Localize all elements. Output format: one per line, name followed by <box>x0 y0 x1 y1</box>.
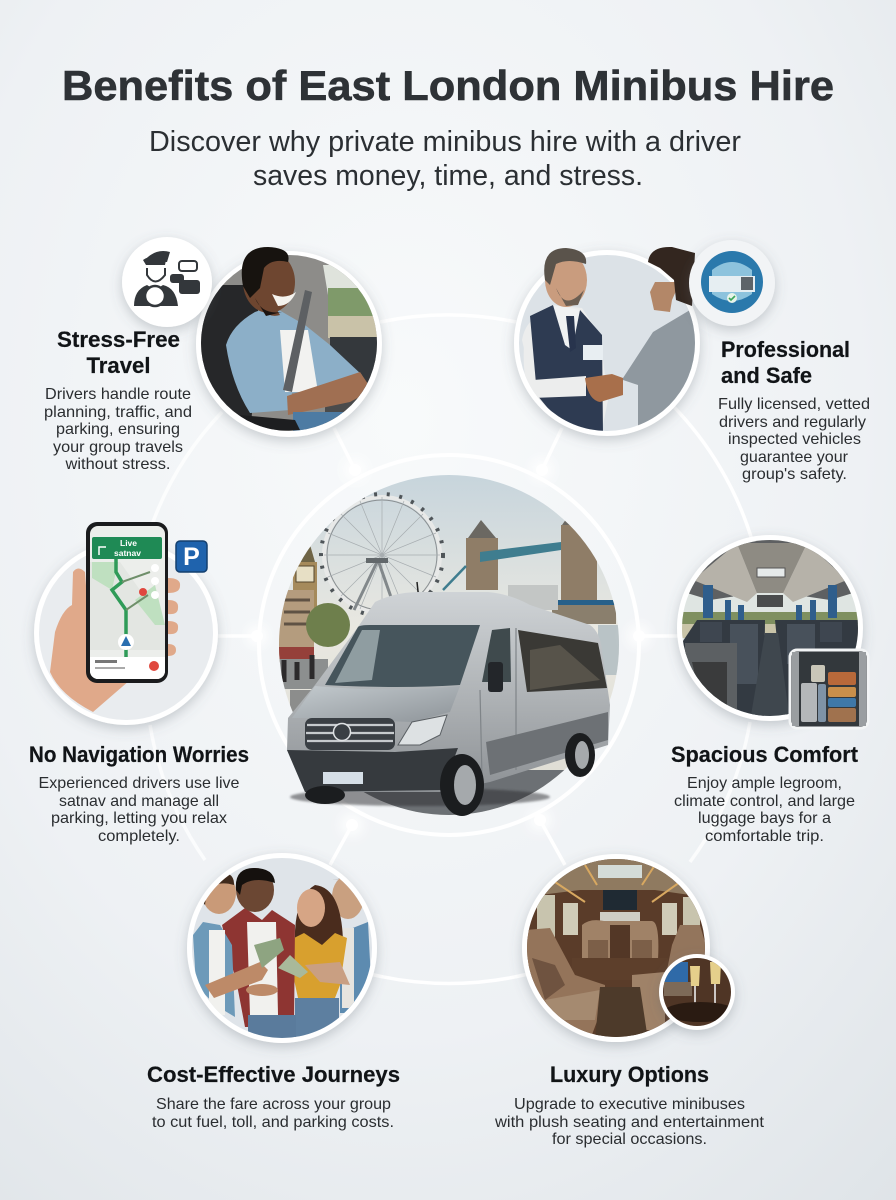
text: Luxury Options: Luxury Options <box>550 1062 709 1087</box>
icon: silver minibus <box>287 582 610 816</box>
text: Cost-Effective Journeys: Share the fare across your group <box>156 1096 391 1113</box>
phone <box>86 522 168 683</box>
text: Stress-Free Travel: your group travels <box>53 439 183 456</box>
text: No Navigation Worries <box>29 742 249 845</box>
text: Stress-Free Travel: Travel <box>86 353 150 378</box>
text: Spacious Comfort: luggage bays for a <box>698 810 831 827</box>
text: Stress-Free Travel: planning, traffic, and <box>44 404 192 421</box>
text: Cost-Effective Journeys <box>147 1062 400 1131</box>
side windows <box>518 630 607 692</box>
text: Professional and Safe: and Safe <box>721 363 812 388</box>
text: No Navigation Worries: Experienced drivers use live <box>38 775 240 792</box>
text: Professional and Safe <box>718 337 870 483</box>
title: Benefits of East London Minibus Hire <box>62 62 834 109</box>
text: Luxury Options: with plush seating and entertainment <box>494 1114 765 1131</box>
text: Cost-Effective Journeys: to cut fuel, toll, and parking costs. <box>152 1114 394 1131</box>
subtitle: Discover why private minibus hire with a driver <box>149 126 741 158</box>
text: Spacious Comfort: climate control, and large <box>674 793 855 810</box>
text: No Navigation Worries: completely. <box>98 828 180 845</box>
photo: phone satnav: Live <box>120 538 137 548</box>
person two <box>222 908 295 1027</box>
icon: parking sign: P <box>183 543 200 571</box>
glowing nodes <box>246 459 650 836</box>
icon: licence badge <box>689 240 775 326</box>
person four <box>340 922 372 1013</box>
icon: chauffeur and traffic <box>122 237 212 327</box>
text: Stress-Free Travel <box>44 327 192 473</box>
text: Professional and Safe: guarantee your <box>740 449 849 466</box>
subtitle: saves money, time, and stress. <box>253 160 643 192</box>
person three <box>294 885 343 945</box>
photo: spacious interior <box>677 535 863 721</box>
door window <box>482 628 511 682</box>
text: Stress-Free Travel: parking, ensuring <box>56 421 180 438</box>
icon: Tower Bridge <box>442 520 619 675</box>
text: Professional and Safe: Professional <box>721 337 850 362</box>
hood <box>292 686 460 722</box>
photo: handshake <box>514 247 700 440</box>
text: Spacious Comfort: Enjoy ample legroom, <box>687 775 842 792</box>
text: Spacious Comfort <box>671 742 859 845</box>
text: Cost-Effective Journeys: Cost-Effective Journeys <box>147 1062 400 1087</box>
icon: champagne and screen <box>659 954 736 1030</box>
text: No Navigation Worries: parking, letting you relax <box>51 810 227 827</box>
text: Stress-Free Travel: Drivers handle route <box>45 386 191 403</box>
text: Stress-Free Travel: without stress. <box>64 456 170 473</box>
subtitle <box>149 126 741 192</box>
windscreen <box>325 625 480 687</box>
text: Stress-Free Travel: Stress-Free <box>57 327 180 352</box>
icon: Big Ben <box>279 546 350 689</box>
person one <box>193 922 235 1017</box>
text: No Navigation Worries: No Navigation Worries <box>29 742 249 767</box>
icon: luggage bay <box>790 650 868 728</box>
photo: luxury interior <box>522 853 710 1043</box>
icon: parking sign <box>176 541 207 572</box>
hand <box>50 568 130 712</box>
photo: phone satnav: satnav <box>114 548 141 558</box>
connecting rings <box>150 315 752 983</box>
text: Luxury Options <box>494 1062 765 1148</box>
text: Luxury Options: Upgrade to executive minibuses <box>514 1096 745 1113</box>
photo: smiling driver <box>196 247 385 440</box>
hands and cash <box>205 962 268 998</box>
icon: London Eye <box>321 494 443 616</box>
text: Professional and Safe: group's safety. <box>742 466 847 483</box>
text: Spacious Comfort: Spacious Comfort <box>671 742 859 767</box>
text: Luxury Options: for special occasions. <box>552 1131 707 1148</box>
photo: group sharing fare <box>187 853 377 1043</box>
text: Professional and Safe: drivers and regularly <box>719 414 866 431</box>
text: Professional and Safe: inspected vehicles <box>728 431 861 448</box>
front bumper <box>287 748 458 792</box>
text: No Navigation Worries: satnav and manage all <box>59 793 219 810</box>
text: Professional and Safe: Fully licensed, vetted <box>718 396 870 413</box>
text: Spacious Comfort: comfortable trip. <box>705 828 824 845</box>
photo: phone satnav <box>34 522 218 725</box>
